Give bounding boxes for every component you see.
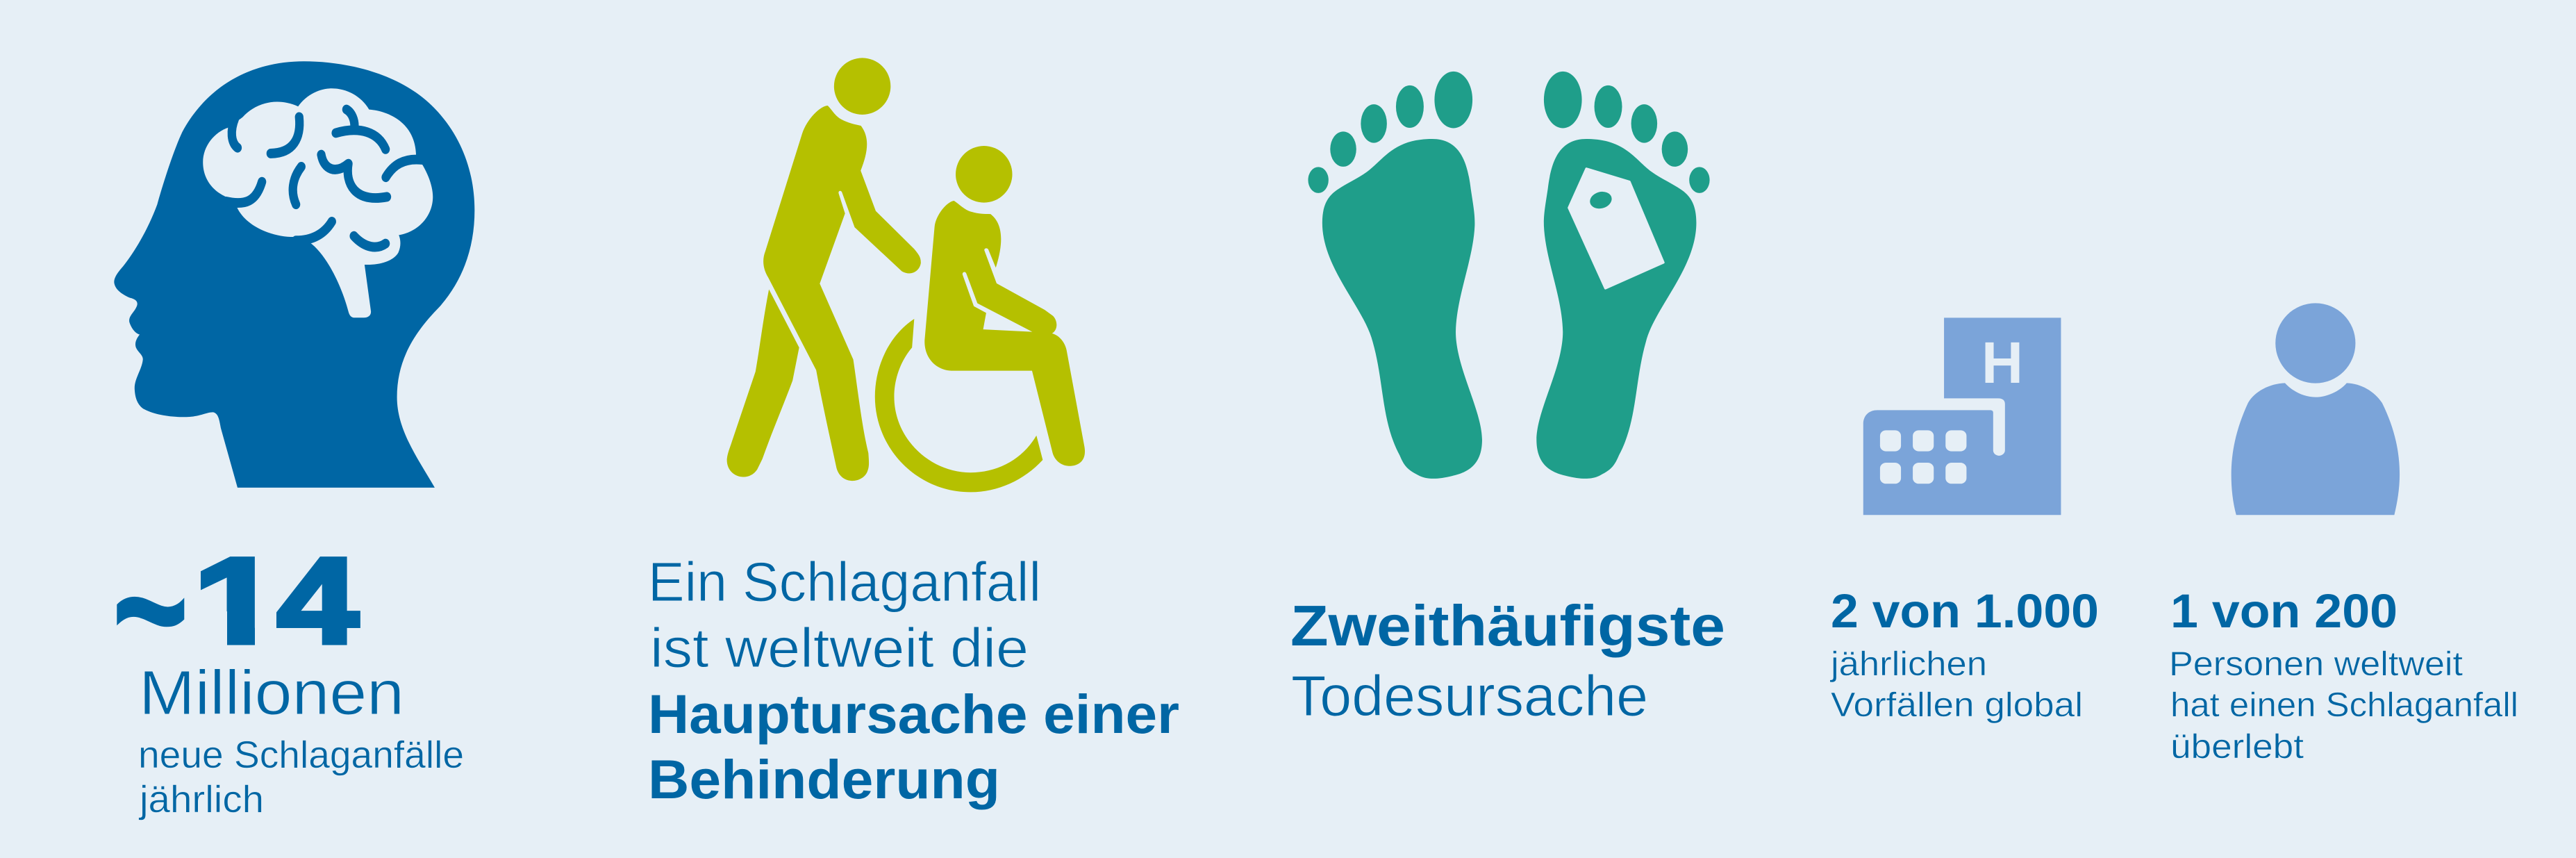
panel: 1 of 200: [2169, 303, 2518, 766]
text: jährlichen Vorfällen global: Vorfällen global: [1831, 686, 2083, 724]
number: ~14: ~: [113, 511, 188, 709]
text: neue Schlaganfälle jährlich: [138, 733, 464, 820]
icon: hospital letter H: H: [1981, 330, 2023, 395]
text: Ein Schlaganfall ist weltweit die: ist weltweit die: [650, 617, 1029, 679]
number: ~14: [117, 556, 360, 645]
text: neue Schlaganfälle jährlich: neue Schlaganfälle: [138, 733, 464, 776]
text: 2 von 1.000: 2 von 1.000: [1831, 584, 2099, 638]
icon: person pushing wheelchair: [727, 58, 1085, 492]
panel: new strokes per year: [113, 61, 474, 820]
text: Personen weltweit hat einen Schlaganfall überlebt: hat einen Schlaganfall: [2170, 686, 2518, 724]
text: Personen weltweit hat einen Schlaganfall überlebt: überlebt: [2170, 728, 2304, 766]
text: jährlichen Vorfällen global: [1829, 645, 2083, 724]
text: Hauptursache einer Behinderung: [648, 683, 1179, 810]
text: jährlichen Vorfällen global: jährlichen: [1829, 645, 1987, 683]
text: Millionen: Millionen: [139, 659, 404, 728]
icon: feet with toe tag: [1308, 72, 1710, 479]
text: Zweithäufigste: Zweithäufigste: [1290, 593, 1725, 658]
icon: head with brain: [114, 61, 474, 488]
text: Ein Schlaganfall ist weltweit die: [648, 551, 1041, 679]
text: neue Schlaganfälle jährlich: jährlich: [138, 777, 264, 820]
text: 1 von 200: 1 von 200: [2170, 584, 2398, 638]
text: Personen weltweit hat einen Schlaganfall überlebt: Personen weltweit: [2169, 645, 2463, 683]
panel: 2 of 1000: [1829, 317, 2099, 724]
icon: person: [2232, 303, 2400, 515]
text: Hauptursache einer Behinderung: Behinderung: [648, 748, 1000, 810]
number: ~14: 1: [193, 533, 281, 669]
text: Hauptursache einer Behinderung: Hauptursache einer: [648, 683, 1179, 745]
number: ~14: 4: [277, 533, 358, 668]
panel: leading cause of disability: [648, 58, 1179, 810]
text: Personen weltweit hat einen Schlaganfall überlebt: [2169, 645, 2518, 766]
panel: second leading cause of death: [1290, 72, 1725, 728]
icon: hospital: [1863, 317, 2061, 515]
text: Ein Schlaganfall ist weltweit die: Ein Schlaganfall: [648, 551, 1041, 613]
text: Todesursache: Todesursache: [1291, 663, 1648, 728]
